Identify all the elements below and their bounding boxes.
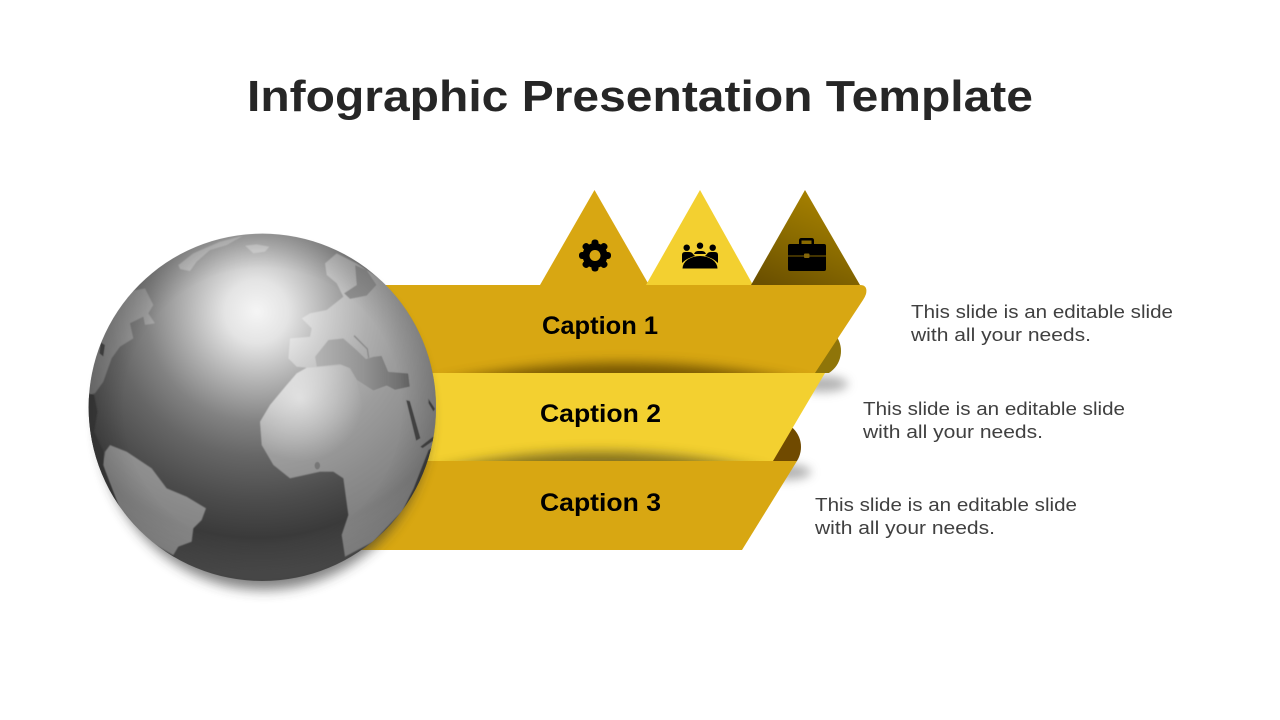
- description 3: This slide is an editable slide: [815, 494, 1077, 515]
- Adriatic coast: [354, 336, 369, 358]
- Africa bright area: [260, 366, 353, 452]
- description 2: [862, 398, 1125, 442]
- icon: gear: [579, 240, 611, 272]
- dark rim on lower left: [87, 392, 175, 558]
- band 2 bottom shadow: [442, 444, 756, 461]
- band 1: [386, 285, 866, 373]
- Greenland: [178, 236, 243, 271]
- description 1: with all your needs.: [910, 324, 1091, 345]
- globe drop shadow: [98, 246, 430, 590]
- description 2: This slide is an editable slide: [863, 398, 1125, 419]
- Europe, Asia and Africa: [260, 253, 447, 557]
- caption 1: Caption 1: [542, 312, 658, 340]
- Gulf of Guinea lake: [314, 462, 320, 470]
- continents: [87, 236, 447, 558]
- triangle tab 1: [540, 190, 649, 285]
- icon: people around table: [682, 242, 718, 268]
- triangle tab 3: [751, 190, 860, 285]
- North America: [87, 288, 155, 395]
- band 1 bottom shadow: [450, 355, 794, 373]
- caption 2: Caption 2: [540, 400, 661, 428]
- Persian Gulf: [428, 398, 435, 412]
- Iceland: [245, 244, 269, 253]
- band 2: [428, 373, 825, 461]
- caption 3: Caption 3: [540, 489, 661, 517]
- icon: briefcase: [788, 238, 826, 271]
- fold tab behind band 1: [811, 338, 852, 398]
- Red Sea: [406, 400, 421, 441]
- description 1: [910, 301, 1173, 345]
- band 3: [300, 461, 797, 550]
- description 3: with all your needs.: [814, 517, 995, 538]
- fold tab behind band 2: [773, 428, 814, 486]
- Mediterranean Sea: [315, 338, 410, 391]
- triangle tabs with icons: [540, 190, 860, 285]
- Gulf of Aden: [420, 436, 434, 448]
- title: Infographic Presentation Template: [247, 72, 1033, 121]
- globe sphere: [89, 234, 436, 581]
- sphere rim shading: [89, 234, 436, 581]
- globe: [87, 234, 447, 581]
- South America: [103, 445, 206, 555]
- description 2: with all your needs.: [862, 421, 1043, 442]
- description 1: This slide is an editable slide: [911, 301, 1173, 322]
- triangle tab 2: [646, 190, 753, 285]
- dark ocean on lower right: [402, 448, 432, 511]
- Great Lakes: [99, 342, 105, 357]
- Baltic Sea: [344, 265, 377, 299]
- infographic canvas: [88, 80, 1172, 599]
- description 3: [814, 494, 1077, 538]
